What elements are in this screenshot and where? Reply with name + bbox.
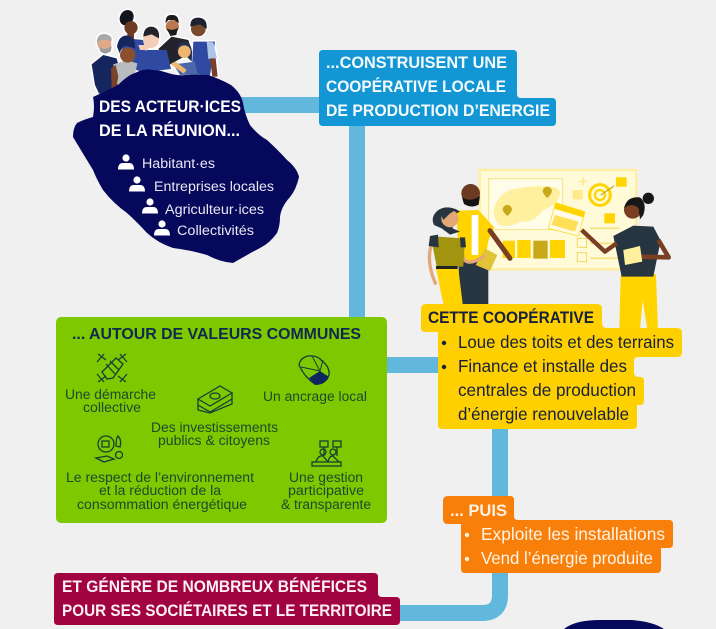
callout: cette coopérative: CETTE COOPÉRATIVE [428, 308, 594, 327]
text: respect de l'environnement [66, 470, 254, 512]
illustration: team at planning board [429, 170, 669, 330]
callout: puis: Exploite les installations [481, 524, 665, 544]
text: gestion participative [281, 470, 371, 512]
text: gestion participative: & transparente [281, 497, 371, 512]
callout: construisent une coopérative: ...CONSTRUISENT UNE [326, 53, 507, 72]
right woman [619, 274, 658, 330]
text: respect de l'environnement: et la réduction de la [99, 483, 221, 498]
icon: banknotes [198, 386, 232, 413]
list: acteurs with person icons: Agriculteur·ices [165, 202, 264, 217]
text: investissements [151, 420, 278, 448]
callout: cette coopérative: d’énergie renouvelable [458, 404, 629, 424]
callout: cette coopérative: Finance et installe des [458, 356, 627, 376]
heading: des acteur·ices: DE LA RÉUNION... [99, 121, 240, 140]
callout: construisent une coopérative: DE PRODUCTION D’ENERGIE [326, 101, 550, 120]
text: investissements: Des investissements [151, 420, 278, 435]
text: investissements: publics & citoyens [158, 433, 270, 448]
icon: hand with leaf and coin [96, 436, 122, 462]
heading: autour de valeurs communes: ... AUTOUR DE VALEURS COMMUNES [72, 326, 361, 343]
callout: puis: Vend l’énergie produite [481, 548, 653, 568]
text: gestion participative: participative [288, 483, 364, 498]
text: une démarche collective: Une démarche [65, 387, 156, 402]
callout: cette coopérative [421, 304, 682, 429]
list: acteurs with person icons: Entreprises locales [154, 179, 274, 194]
callout: bénéfices [54, 573, 400, 625]
callout: bénéfices: POUR SES SOCIÉTAIRES ET LE TERRITOIRE [62, 601, 392, 620]
callout: puis: ... PUIS [450, 501, 507, 520]
text: une démarche collective: collective [83, 400, 141, 415]
heading: des acteur·ices: DES ACTEUR·ICES [99, 98, 241, 116]
callout: puis [443, 496, 673, 573]
icon: hands together [97, 354, 127, 382]
panel: valeurs communes [56, 317, 387, 523]
icon: island local [299, 356, 329, 385]
list: acteurs with person icons: Collectivités [177, 223, 254, 238]
callout: cette coopérative: Loue des toits et des terrains [458, 332, 674, 352]
list: acteurs with person icons: Habitant·es [142, 156, 215, 171]
text: respect de l'environnement: Le respect de l’environnement [66, 470, 254, 485]
callout: construisent une coopérative [319, 50, 556, 126]
list: acteurs with person icons [118, 154, 274, 238]
navy shape at bottom [564, 620, 664, 629]
connector lines [240, 105, 500, 613]
text: une démarche collective [65, 387, 156, 415]
heading: des acteur·ices [99, 98, 241, 140]
left woman [429, 247, 435, 283]
callout: construisent une coopérative: COOPÉRATIVE LOCALE [326, 77, 506, 96]
callout: bénéfices: ET GÉNÈRE DE NOMBREUX BÉNÉFICES [62, 577, 367, 596]
island shape: La Réunion [73, 69, 299, 263]
text: respect de l'environnement: consommation énergétique [77, 497, 247, 512]
callout: cette coopérative: centrales de production [458, 380, 636, 400]
illustration: group of people [92, 7, 218, 94]
man [458, 260, 488, 304]
text: gestion participative: Une gestion [289, 470, 363, 485]
text: un ancrage local: Un ancrage local [263, 389, 367, 404]
icon: people voting [312, 441, 341, 466]
